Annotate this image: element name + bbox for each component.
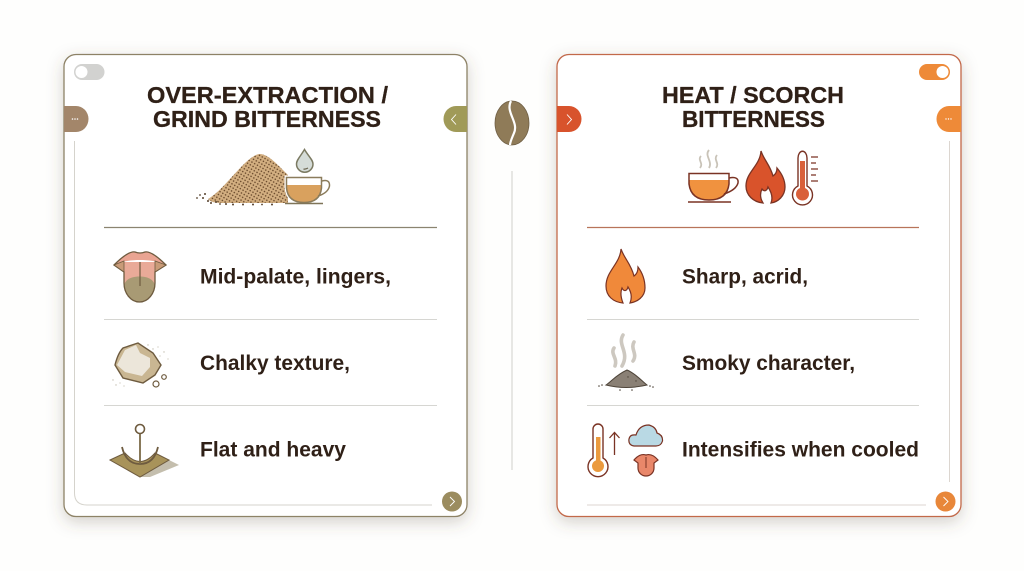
right tab: [936, 106, 961, 132]
inner frame lines: [587, 141, 950, 505]
next button: [442, 492, 462, 512]
text: Mid-palate, lingers,: [200, 266, 391, 288]
row: mid-palate: [114, 252, 391, 302]
heading: BITTERNESS: [682, 106, 825, 132]
icon: coffee grounds, water drop and cup: [196, 150, 330, 206]
inner frame line: [74, 141, 432, 505]
icon: anchor: [110, 424, 179, 477]
row divider: [104, 318, 437, 320]
text: Flat and heavy: [200, 438, 346, 462]
row divider: [587, 404, 919, 406]
row: chalky: [112, 343, 350, 387]
row: flat and heavy: [110, 424, 346, 477]
text: Smoky character,: [682, 352, 855, 375]
icon: smoke over ash pile: [598, 335, 654, 391]
next button: [936, 492, 956, 512]
heading: [147, 82, 388, 132]
icon: chalk rock: [112, 343, 169, 387]
row divider: [104, 404, 437, 406]
heading: OVER-EXTRACTION /: [147, 82, 388, 108]
heading: GRIND BITTERNESS: [153, 106, 381, 132]
right tab: [444, 106, 467, 132]
icon: hot cup, flame and thermometer: [688, 150, 818, 205]
text: Chalky texture,: [200, 352, 350, 375]
heading divider: [104, 226, 437, 228]
card background: [557, 54, 961, 516]
icon: coffee bean: [495, 101, 529, 145]
heading: [662, 82, 844, 132]
text: Sharp, acrid,: [682, 266, 808, 288]
heading divider: [587, 226, 919, 228]
row: intensifies when cooled: [588, 424, 919, 477]
row divider: [587, 318, 919, 320]
panel: over-extraction / grind bitterness: [64, 54, 467, 516]
left tab: [557, 106, 582, 132]
toggle switch: [74, 64, 104, 80]
row: smoky: [598, 335, 855, 391]
panel: heat / scorch bitterness: [557, 54, 961, 516]
icon: flame: [606, 249, 645, 303]
left tab: [64, 106, 88, 132]
icon: thermometer, arrow, cloud and tongue: [588, 424, 663, 477]
icon: tongue: [114, 252, 166, 302]
heading: HEAT / SCORCH: [662, 82, 844, 108]
toggle switch: [919, 64, 950, 80]
row: sharp, acrid: [606, 249, 808, 303]
card background: [64, 54, 467, 516]
center connector line: [511, 171, 513, 470]
text: Intensifies when cooled: [682, 438, 919, 462]
